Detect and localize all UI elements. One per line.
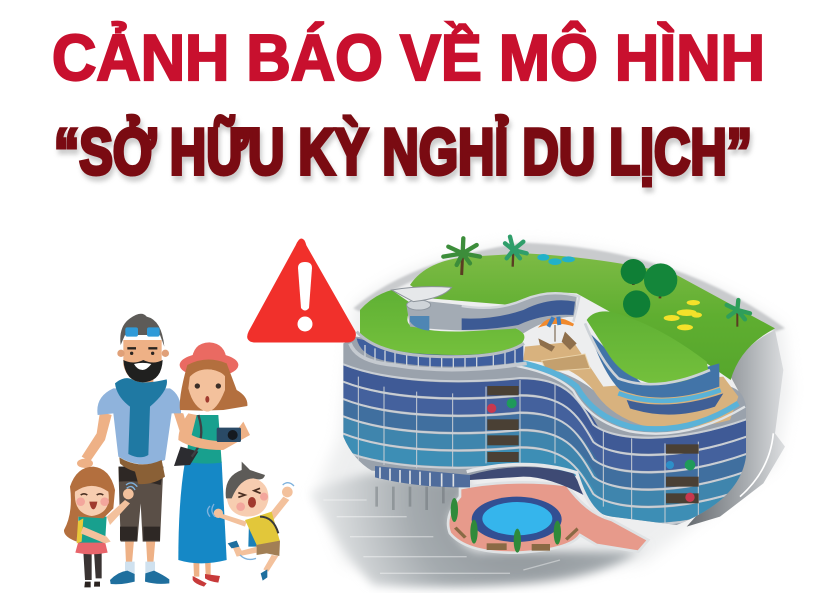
- girl face: [75, 486, 109, 516]
- title line 1: CẢNH BÁO VỀ MÔ HÌNH: [52, 21, 765, 94]
- canopy white edge: [467, 464, 603, 517]
- small palm right: [727, 300, 750, 327]
- girl cheeks: [76, 497, 85, 506]
- man beard: [123, 360, 163, 382]
- girl hand: [123, 489, 134, 499]
- swimming pool: [472, 497, 562, 542]
- warning triangle icon: [249, 240, 354, 341]
- terrace rail edge: [517, 366, 745, 434]
- boy shorts: [256, 541, 280, 556]
- fringe: [187, 360, 227, 380]
- palm tree left: [443, 238, 480, 275]
- eyes: [195, 383, 200, 389]
- woman skirt: [178, 462, 227, 563]
- boy hair: [226, 462, 265, 498]
- man face: [123, 340, 162, 382]
- smile: [134, 363, 151, 370]
- woman other arm: [223, 422, 250, 450]
- front left lawn: [360, 290, 524, 355]
- boy cheeks: [236, 502, 245, 511]
- lawn rim right: [585, 323, 710, 384]
- white road curve: [740, 433, 773, 497]
- woman back hair: [180, 360, 247, 411]
- scarf: [115, 378, 167, 457]
- front right lawn: [587, 311, 708, 384]
- girl arms: [81, 500, 130, 543]
- open balconies: [487, 386, 699, 503]
- rock wall right: [687, 330, 785, 527]
- boy: [207, 462, 294, 581]
- building facade: [343, 337, 746, 525]
- pavilion side windows: [410, 316, 429, 331]
- boy shoes: [228, 541, 267, 581]
- woman hat: [180, 342, 238, 377]
- terrace floor: [523, 342, 738, 428]
- terrace glass rail: [517, 362, 738, 429]
- man: [77, 314, 190, 584]
- pavilion round: [407, 300, 431, 310]
- sunglasses: [125, 327, 160, 337]
- girl skirt: [75, 542, 108, 554]
- lower upper-right glazing: [627, 393, 723, 415]
- boy arms: [215, 497, 289, 527]
- motion marks: [207, 483, 294, 559]
- soft shadow behind hotel: [317, 243, 790, 580]
- yellow flowers: [664, 300, 702, 330]
- upper right rail: [618, 390, 721, 401]
- patio umbrella: [542, 317, 573, 342]
- girl backpack: [77, 518, 83, 543]
- terrace steps: [542, 354, 590, 372]
- woman bag: [174, 447, 198, 466]
- girl mouth: [89, 502, 97, 509]
- pavilion roof edge: [462, 293, 579, 322]
- upper storey glazing left: [357, 338, 523, 367]
- man shirt: [97, 388, 181, 464]
- upper storey sill: [350, 343, 527, 370]
- palm tree middle: [505, 237, 527, 267]
- rim arc behind lawn: [353, 243, 785, 332]
- title: [52, 21, 765, 193]
- lawn rim left: [357, 332, 524, 357]
- ground floor colonnade: [375, 466, 470, 487]
- fan structure: [392, 287, 452, 302]
- boy strap: [260, 517, 278, 533]
- upper right glazing: [590, 333, 719, 398]
- boy backpack: [248, 520, 258, 547]
- mouth: [205, 396, 209, 403]
- boy head: [227, 477, 268, 517]
- camera: [217, 428, 241, 442]
- ears: [117, 350, 125, 357]
- girl legs: [83, 552, 102, 580]
- girl: [64, 467, 137, 587]
- water reflections: [323, 487, 560, 573]
- canopy under the building: [470, 467, 587, 497]
- back lawn: [410, 253, 775, 380]
- boy hands: [214, 509, 223, 518]
- man shorts: [118, 467, 163, 542]
- boy mouth: [248, 497, 256, 508]
- pavilion glass: [462, 300, 575, 330]
- central glazed pavilion: [407, 293, 577, 333]
- exclamation mark: [298, 262, 312, 332]
- boy shirt: [245, 512, 280, 545]
- woman shoes: [193, 574, 220, 587]
- man arms: [82, 412, 112, 462]
- woman: [174, 342, 250, 587]
- facade floors: [340, 363, 750, 524]
- woman top: [187, 415, 222, 464]
- boy legs: [232, 545, 278, 572]
- eyes and brows: [127, 345, 157, 352]
- colonnade columns: [380, 467, 453, 487]
- girl shoes: [84, 582, 100, 587]
- cypress trees: [451, 498, 561, 553]
- neck: [132, 373, 153, 387]
- lagoon water: [310, 473, 650, 587]
- man socks: [125, 562, 155, 574]
- woman legs: [193, 560, 211, 577]
- man shoes: [110, 571, 169, 584]
- girl hair: [64, 467, 115, 542]
- balcony furniture: [487, 398, 695, 502]
- deck chairs: [538, 332, 577, 352]
- man legs: [125, 540, 155, 563]
- woman arm: [178, 413, 225, 450]
- upper mullions: [365, 345, 515, 370]
- round trees: [621, 259, 677, 318]
- wave marks: [126, 483, 137, 490]
- girl top: [78, 517, 107, 543]
- girl eyes: [81, 494, 103, 495]
- hand on girl: [77, 459, 93, 468]
- family illustration: [64, 314, 294, 587]
- pool deck: [448, 482, 648, 553]
- man belt bag: [119, 457, 165, 484]
- man hair: [120, 314, 164, 347]
- woman face: [188, 369, 225, 412]
- pool loungers: [454, 527, 579, 551]
- bag strap: [192, 415, 201, 457]
- shorts shading: [119, 467, 163, 541]
- boy eyes: [238, 488, 261, 497]
- blue flowers: [537, 254, 575, 265]
- hotel illustration: [310, 237, 790, 587]
